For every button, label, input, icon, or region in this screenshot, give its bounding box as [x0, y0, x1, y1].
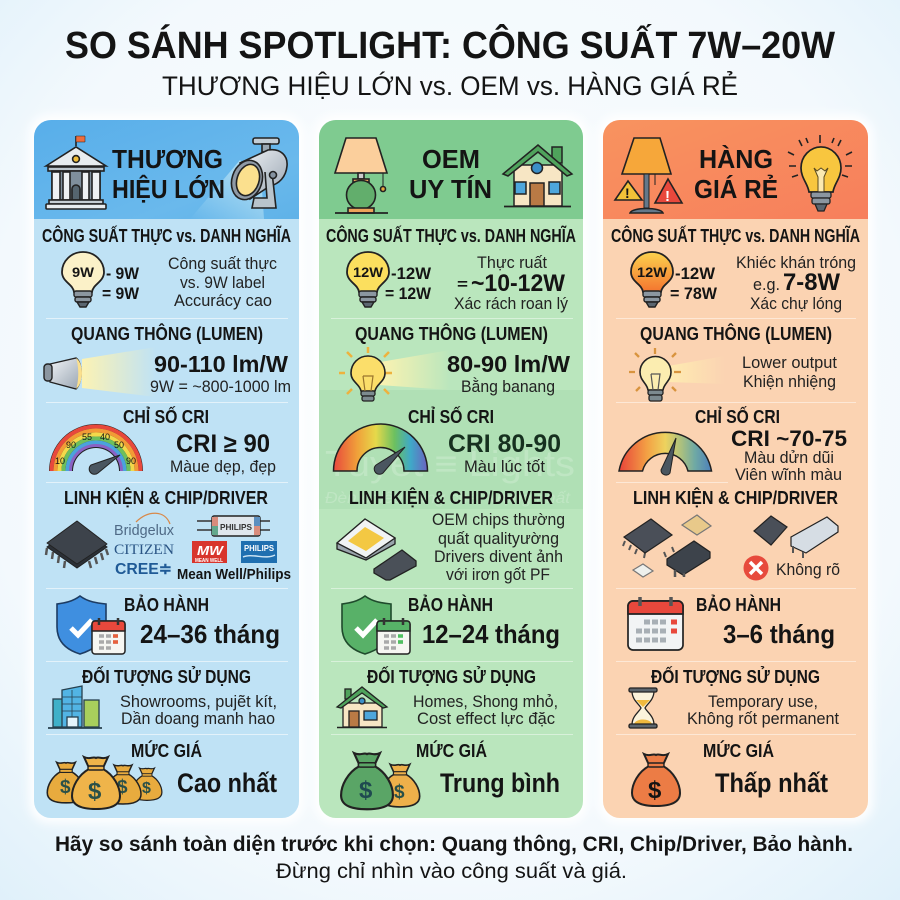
power description: [454, 253, 568, 313]
icon: money bag: [632, 754, 680, 806]
section heading: CÔNG SUẤT THỰC vs. DANH NGHĨA: [326, 225, 576, 246]
section: CRI: [49, 406, 276, 476]
icon: hourglass: [629, 688, 657, 728]
section heading: MỨC GIÁ: [703, 740, 774, 761]
section heading: CHỈ SỐ CRI: [695, 406, 780, 427]
audience description: Showrooms, pujẽt kít,: [120, 692, 277, 711]
power values: - 9W: [106, 264, 140, 283]
section: lumen: [629, 323, 837, 401]
power description: Accurácy cao: [174, 291, 272, 310]
section: lumen: [44, 323, 291, 397]
section: components: [337, 487, 565, 584]
logo: Citizen: CITIZEN: [114, 542, 174, 558]
panel heading: GIÁ RẺ: [694, 174, 778, 204]
panel heading: HÀNG: [699, 144, 773, 174]
icon: 12W bulb: [347, 252, 389, 307]
panel header band: [34, 120, 299, 219]
panel header band: [603, 120, 868, 219]
caption: Mean Well/Philips: [177, 566, 291, 583]
section: CRI: [619, 406, 847, 484]
price value: Trung bình: [440, 768, 560, 798]
icon: money bags: $: [88, 778, 102, 805]
chart: rainbow CRI gauge: 90: [126, 456, 136, 466]
section heading: ĐỐI TƯỢNG SỬ DỤNG: [651, 666, 820, 687]
panel heading: HIỆU LỚN: [112, 174, 225, 204]
icon: money bags: $: [60, 777, 71, 798]
section heading: ĐỐI TƯỢNG SỬ DỤNG: [82, 666, 251, 687]
logo: Mean Well: MEAN WELL: [195, 558, 224, 564]
power description: 7-8W: [783, 269, 840, 296]
icon: 12W bulb: 12W: [353, 264, 384, 280]
section heading: LINH KIỆN & CHIP/DRIVER: [633, 487, 838, 508]
price value: Thấp nhất: [715, 768, 828, 798]
component description: Drivers divent ảnh: [434, 547, 563, 566]
component description: OEM chips thường: [432, 510, 565, 529]
section heading: QUANG THÔNG (LUMEN): [355, 323, 548, 344]
CRI value: Màu lúc tốt: [464, 457, 545, 476]
panel heading: UY TÍN: [409, 174, 492, 204]
CRI value: [170, 430, 276, 476]
CRI value: Viên wĩnh màu: [735, 465, 842, 484]
icon: office building: [48, 686, 102, 728]
icon: money bags: $: [394, 782, 405, 803]
warranty value: 24–36 tháng: [140, 619, 280, 649]
power description: Thực ruất: [477, 253, 547, 272]
logo: Mean Well: [192, 541, 227, 564]
subtitle: THƯƠNG HIỆU LỚN vs. OEM vs. HÀNG GIÁ RẺ: [162, 69, 738, 101]
panel heading: [409, 144, 492, 204]
icon: 9W bulb: [62, 252, 104, 307]
section heading: BẢO HÀNH: [696, 594, 781, 615]
lumen value: 9W = ~800-1000 lm: [150, 377, 291, 396]
section heading: BẢO HÀNH: [408, 594, 493, 615]
section: lumen: [339, 323, 570, 401]
power description: ~10-12W: [471, 270, 565, 297]
audience description: [413, 692, 558, 728]
icon: bulb with beam: [339, 347, 450, 401]
panel heading: THƯƠNG: [112, 144, 223, 174]
logo: Mean Well: MW: [197, 543, 225, 558]
icon: money bags: $: [142, 780, 151, 797]
section: price: [47, 740, 277, 809]
section: real power: [611, 225, 860, 313]
power values: -12W: [675, 264, 716, 283]
panel heading: [112, 144, 225, 204]
icon: chip: [46, 521, 108, 568]
panel header band: [319, 120, 583, 219]
audience description: Không rốt permanent: [687, 709, 839, 728]
power values: = 78W: [670, 284, 718, 303]
component description: [432, 510, 565, 584]
icon: money bags: $: [359, 777, 373, 804]
section heading: BẢO HÀNH: [124, 594, 209, 615]
icon: dim bulb with beam: [629, 348, 725, 401]
icon: lamp with warnings: !: [665, 188, 670, 205]
panel body: [319, 120, 583, 818]
icon: money bags: [341, 753, 420, 809]
icon: 12W bulb: 12W: [637, 264, 668, 280]
icon: money bags: $: [117, 777, 128, 798]
icon: 9W bulb: 9W: [72, 264, 95, 280]
component description: với irơn gốt PF: [446, 565, 550, 584]
power values: -12W: [391, 264, 432, 283]
section: audience: [337, 666, 558, 728]
icon: lamp with warnings: !: [625, 185, 630, 201]
audience description: [687, 692, 839, 728]
panel heading: [694, 144, 778, 204]
icon: house: [503, 145, 572, 206]
chart: rainbow CRI gauge: 90: [66, 440, 76, 450]
icon: bank building: [46, 136, 106, 209]
status text: Không rõ: [776, 560, 840, 579]
power description: Công suất thực: [168, 254, 277, 273]
audience description: Dần doang manh hao: [121, 709, 275, 728]
section heading: QUANG THÔNG (LUMEN): [71, 323, 263, 344]
icon: Philips driver: [197, 516, 270, 536]
warranty value: 12–24 tháng: [422, 619, 560, 649]
section heading: MỨC GIÁ: [131, 740, 202, 761]
section: warranty: [628, 594, 835, 650]
chart: rainbow CRI gauge: 55: [82, 432, 92, 442]
section heading: LINH KIỆN & CHIP/DRIVER: [349, 487, 553, 508]
lumen description: Lower output: [742, 353, 837, 372]
power description: Xác rách roan lý: [454, 294, 568, 313]
power description: Khiéc khán tróng: [736, 253, 856, 272]
section: price: [632, 740, 828, 806]
power description: vs. 9W label: [180, 273, 265, 292]
section heading: CHỈ SỐ CRI: [123, 406, 209, 427]
section: CRI: [334, 406, 561, 476]
audience description: Cost effect lực đặc: [417, 709, 555, 728]
power description: Xác chự lóng: [750, 294, 842, 313]
icon: table lamp: [335, 138, 388, 213]
power values: = 9W: [102, 284, 140, 303]
logo: Bridgelux: Bridgelux: [114, 522, 174, 539]
footer note: [55, 833, 853, 883]
power values: [670, 264, 718, 303]
power description: [736, 253, 856, 313]
icon: calendar: [628, 597, 683, 650]
CRI value: [731, 426, 847, 484]
audience description: [120, 692, 277, 728]
panel: hàng giá rẻ: [603, 120, 868, 818]
chart: rainbow CRI gauge: 10: [55, 456, 65, 466]
chart: CRI gauge: [619, 432, 712, 475]
power values: [102, 264, 140, 303]
chart: rainbow CRI gauge: [49, 424, 143, 474]
power description: [168, 254, 277, 310]
icon: LED chip: [337, 519, 395, 560]
panel: thương hiệu lớn: [34, 120, 299, 818]
section heading: MỨC GIÁ: [416, 740, 487, 761]
CRI value: Màu dửn dũi: [744, 448, 834, 467]
footer note: Đừng chỉ nhìn vào công suất và giá.: [276, 860, 627, 883]
icon: Philips driver: PHILIPS: [220, 522, 252, 532]
panel body: [603, 120, 868, 818]
icon: shield with calendar: [342, 596, 410, 654]
section: price: [341, 740, 560, 809]
lumen value: 80-90 lm/W: [447, 351, 570, 377]
chart: rainbow CRI gauge: 40: [100, 432, 110, 442]
title: SO SÁNH SPOTLIGHT: CÔNG SUẤT 7W–20W: [65, 22, 835, 67]
icon: money bag: $: [648, 777, 662, 804]
lumen value: 90-110 lm/W: [154, 351, 288, 377]
logo: Cree: CREE≑: [115, 561, 172, 578]
section: warranty: [342, 594, 560, 654]
icon: money bags: [47, 757, 162, 809]
icon: spotlight bulb with beam: [44, 347, 156, 397]
power description: e.g.: [753, 275, 780, 294]
section: components: [623, 487, 840, 580]
section: components: [46, 487, 291, 583]
warranty value: 3–6 tháng: [723, 619, 835, 649]
audience description: Temporary use,: [708, 692, 818, 711]
lumen value: [150, 351, 291, 396]
lumen description: Khiện nhiệng: [743, 372, 836, 391]
footer note: Hãy so sánh toàn diện trước khi chọn: Quang thông, CRI, Chip/Driver, Bảo hành.: [55, 833, 853, 856]
component description: quất qualityường: [438, 529, 559, 548]
CRI value: Màue dẹp, đẹp: [170, 457, 276, 476]
CRI value: [448, 430, 561, 476]
logo: Bridgelux: [114, 513, 174, 539]
section: audience: [629, 666, 839, 728]
section: real power: [42, 225, 291, 310]
lumen value: [447, 351, 570, 396]
panel heading: OEM: [422, 144, 480, 174]
watermark band: Đèn chiếu sáng chất lượng nhất: [325, 490, 571, 507]
section: audience: [48, 666, 277, 728]
CRI value: CRI ≥ 90: [176, 430, 270, 458]
watermark band: Tuyet ≡ Lights: [325, 443, 575, 484]
section heading: LINH KIỆN & CHIP/DRIVER: [64, 487, 268, 508]
section heading: QUANG THÔNG (LUMEN): [640, 323, 832, 344]
section heading: CHỈ SỐ CRI: [408, 406, 494, 427]
icon: 12W bulb: [631, 252, 673, 307]
icon: lamp with warnings: [615, 138, 682, 213]
icon: shield with calendar: [57, 596, 125, 654]
logo: Philips: PHILIPS: [244, 544, 275, 553]
section: real power: [326, 225, 576, 313]
lumen description: [742, 353, 837, 391]
section heading: ĐỐI TƯỢNG SỬ DỤNG: [367, 666, 536, 687]
panel: OEM uy tín: [319, 120, 583, 818]
section: warranty: [57, 594, 280, 654]
icon: driver block: [374, 550, 416, 580]
power values: = 12W: [385, 284, 432, 303]
price value: Cao nhất: [177, 768, 277, 798]
watermark band: [319, 390, 583, 509]
CRI value: CRI ~70-75: [731, 426, 847, 451]
chart: CRI gauge: [334, 424, 428, 474]
logo: Philips: [241, 541, 277, 563]
panel body: [34, 120, 299, 818]
icon: bright bulb: [788, 135, 852, 211]
power values: [385, 264, 432, 303]
icon: red cross: [744, 556, 768, 580]
chart: rainbow CRI gauge: 50: [114, 440, 124, 450]
lumen value: Bằng banang: [461, 377, 555, 396]
icon: spotlight: [227, 138, 287, 208]
section heading: CÔNG SUẤT THỰC vs. DANH NGHĨA: [42, 225, 291, 246]
icon: small house: [337, 687, 387, 728]
icon: assorted chips: [623, 515, 838, 577]
CRI value: CRI 80-90: [448, 430, 561, 458]
audience description: Homes, Shong mhỏ,: [413, 692, 558, 711]
power description: =: [457, 276, 468, 293]
